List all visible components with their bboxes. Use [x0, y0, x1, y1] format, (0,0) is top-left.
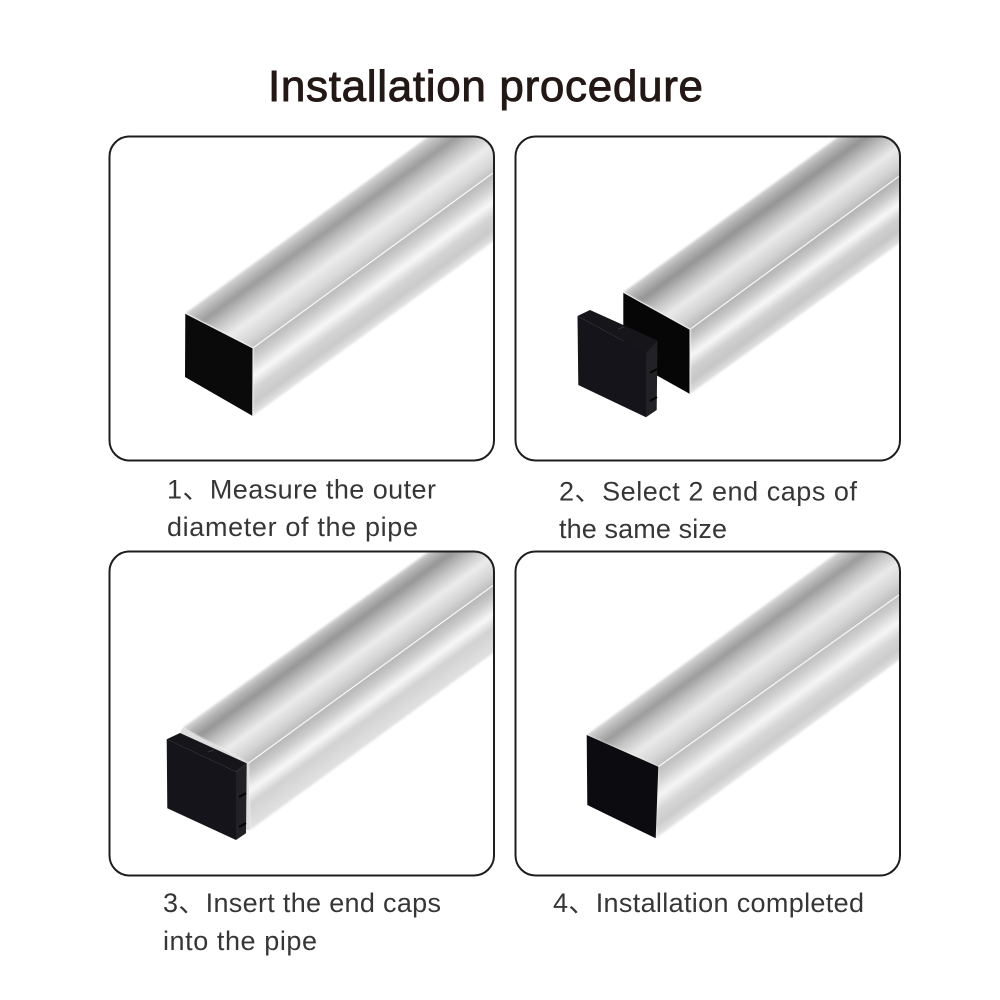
- panel: step 4 capped pipe: [516, 545, 906, 876]
- image: square pipe with open end: [623, 130, 906, 394]
- panel: step 3 cap being inserted: [110, 545, 500, 876]
- image: square pipe with cap fitted: [587, 545, 906, 838]
- caption: step 1: diameter of the pipe: [167, 512, 418, 542]
- caption: step 2: [559, 476, 857, 544]
- caption: step 1: 1、Measure the outer: [167, 474, 436, 504]
- caption: step 1: [167, 474, 436, 542]
- caption: step 4: 4、Installation completed: [553, 888, 864, 918]
- caption: step 3: 3、Insert the end caps: [163, 888, 441, 918]
- caption: step 2: the same size: [559, 514, 727, 544]
- panel: step 2 pipe with end cap: [516, 130, 906, 460]
- panel: step 1 bare pipe: [110, 130, 500, 460]
- caption: step 3: [163, 888, 441, 956]
- caption: step 2: 2、Select 2 end caps of: [559, 476, 857, 506]
- icon: black end cap: [578, 310, 658, 417]
- caption: step 3: into the pipe: [163, 926, 317, 956]
- image: square pipe with cap at end: [180, 545, 500, 830]
- image: square pipe with open end: [185, 130, 500, 416]
- icon: black end cap inserted: [167, 733, 247, 840]
- title: Installation procedure: [268, 62, 703, 111]
